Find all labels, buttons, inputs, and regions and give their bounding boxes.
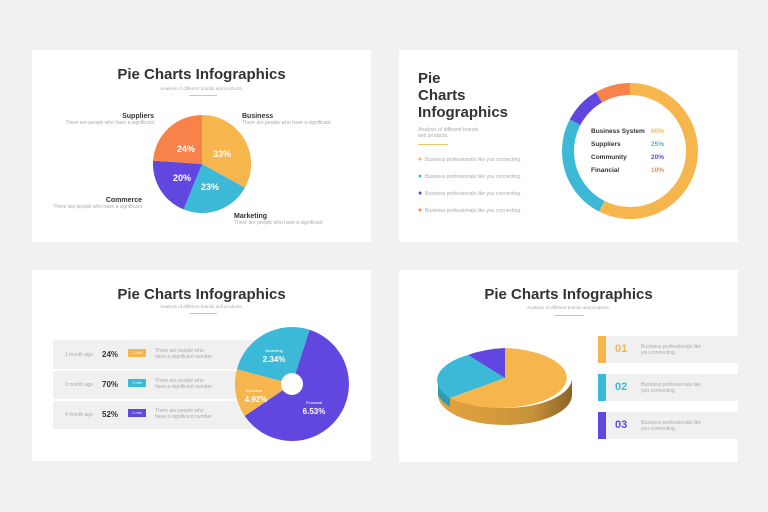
subtitle <box>418 127 478 139</box>
row 3: 1 min <box>132 410 142 415</box>
item 01: Business professionals like <box>641 344 701 350</box>
label: suppliers: There are people who have a significant <box>65 120 154 126</box>
row 2: 1 min <box>132 380 142 385</box>
title: Pie Charts Infographics <box>484 286 653 303</box>
item 03: 03 <box>615 419 627 431</box>
row 3 <box>53 401 255 429</box>
pie chart 3: Business <box>246 388 262 393</box>
donut legend: Business System <box>591 128 645 135</box>
label: commerce: Commerce <box>106 197 142 204</box>
panel: top-right donut <box>399 50 738 242</box>
label: business: Business <box>242 113 273 120</box>
panel: bottom-left <box>32 270 371 461</box>
label: marketing <box>234 212 323 226</box>
row 2: There are people who <box>155 378 204 384</box>
pie chart 3: Financial <box>306 400 322 405</box>
item 02: 02 <box>615 381 627 393</box>
pie chart 3: Marketing <box>265 348 283 353</box>
label: business <box>242 112 331 126</box>
label: business: There are people who have a significant <box>242 120 331 126</box>
panel: top-right donut: ● Business professionals like you connecting. <box>418 190 521 197</box>
row 3: There are people who <box>155 408 204 414</box>
subtitle: Analysis of different brands and products. <box>527 305 610 310</box>
row 2: 3 month ago <box>65 382 93 388</box>
title <box>418 70 508 121</box>
donut legend <box>591 128 664 174</box>
row 1: have a significant number <box>155 354 212 360</box>
label: marketing: There are people who have a significant <box>234 220 323 226</box>
row 3: 52% <box>102 410 118 419</box>
row 1: 24% <box>102 350 118 359</box>
donut legend: 20% <box>651 154 664 161</box>
donut legend: 60% <box>651 128 664 135</box>
bullet list <box>418 156 522 214</box>
row 2: have a significant number <box>155 384 212 390</box>
item 02: Business professionals like <box>641 382 701 388</box>
item 03: Business professionals like <box>641 420 701 426</box>
row 1: There are people who <box>155 348 204 354</box>
donut legend: Community <box>591 154 627 161</box>
row 1: 1 min <box>132 350 142 355</box>
label: suppliers <box>65 112 154 126</box>
label: suppliers: Suppliers <box>122 113 154 120</box>
row 1: 1 month ago <box>65 352 93 358</box>
subtitle: Analysis of different brands and products. <box>160 86 243 91</box>
pie chart 3: 4.92% <box>245 395 267 404</box>
donut legend: Financial <box>591 167 619 174</box>
label: commerce <box>53 197 142 210</box>
title: Pie Charts Infographics <box>117 286 286 303</box>
donut legend: Suppliers <box>591 141 621 148</box>
panel: top-left pie <box>32 50 371 242</box>
panel: top-right donut: ● Business professionals like you connecting. <box>418 173 521 180</box>
title: Pie <box>418 70 441 87</box>
row 2 <box>53 371 255 399</box>
panel: bottom-right <box>399 270 738 462</box>
item 01: 01 <box>615 343 627 355</box>
label: commerce: There are people who have a significant <box>53 204 142 210</box>
pie chart 1: 33% <box>213 149 231 159</box>
title: Charts <box>418 87 466 104</box>
label: marketing: Marketing <box>234 213 267 220</box>
panel: top-right donut: ● Business professionals like you connecting. <box>418 207 521 214</box>
pie chart 1: 24% <box>177 144 195 154</box>
subtitle: Analysis of different brands <box>418 127 478 133</box>
item 03 <box>598 412 738 439</box>
donut legend: 10% <box>651 167 664 174</box>
title: Pie Charts Infographics <box>117 66 286 83</box>
title: Infographics <box>418 104 508 121</box>
pie chart 3: 6.53% <box>303 407 325 416</box>
panel: top-right donut: ● Business professionals like you connecting. <box>418 156 521 163</box>
item 02 <box>598 374 738 401</box>
row 1 <box>53 340 255 369</box>
item 02: you connecting. <box>641 388 676 394</box>
pie chart 1: 23% <box>201 182 219 192</box>
item 01: you connecting. <box>641 350 676 356</box>
row 2: 70% <box>102 380 118 389</box>
item 03: you connecting. <box>641 426 676 432</box>
pie chart 1: 20% <box>173 173 191 183</box>
row 3: 4 month ago <box>65 412 93 418</box>
item 01 <box>598 336 738 363</box>
subtitle: and products. <box>418 133 448 139</box>
row 3: have a significant number <box>155 414 212 420</box>
subtitle: Analysis of different brands and products. <box>160 304 243 309</box>
pie chart 3: 2.34% <box>263 355 285 364</box>
donut legend: 25% <box>651 141 664 148</box>
